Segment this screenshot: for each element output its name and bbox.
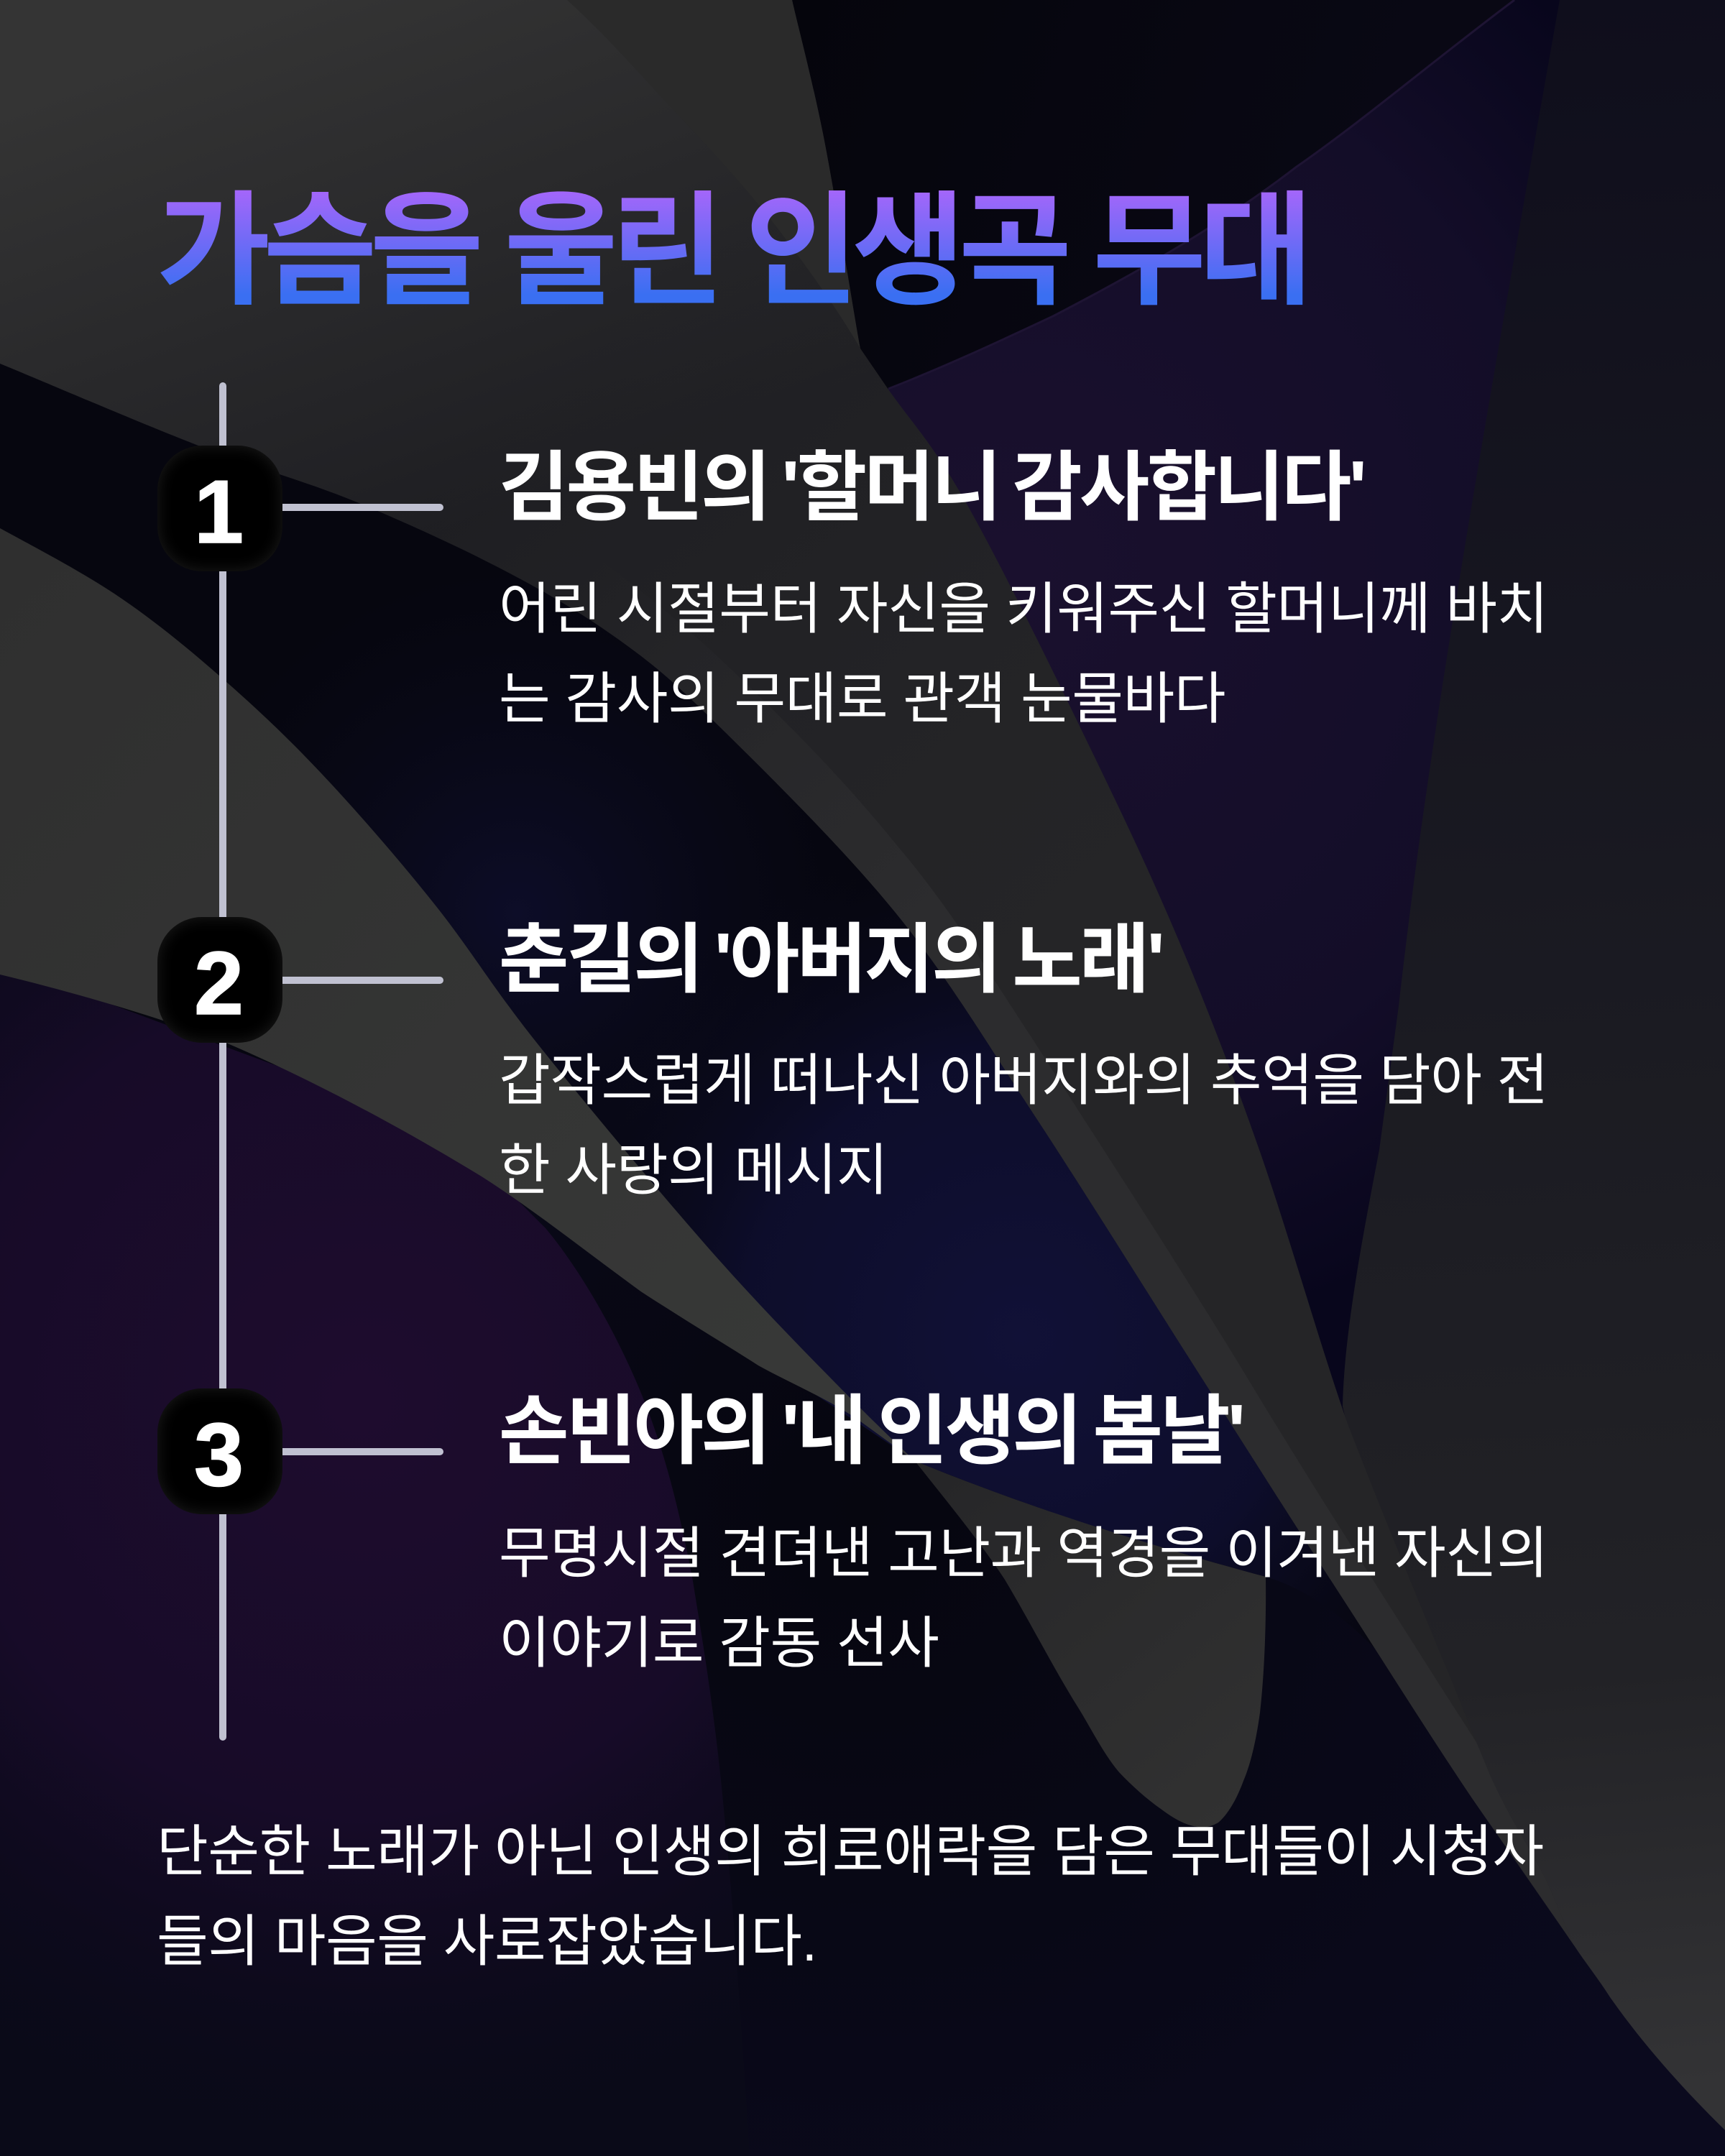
top dark region: [755, 0, 1514, 389]
left shape: [0, 528, 915, 1461]
number badge 2: [157, 917, 282, 1043]
closing summary: 단순한 노래가 아닌 인생의 희로애락을 담은 무대들이 시청자: [157, 1820, 1544, 1883]
closing summary: [157, 1820, 1544, 1973]
blue glow in central band: [0, 345, 1402, 1667]
right wedge: [1343, 0, 1725, 2130]
body 3: [499, 1521, 1548, 1674]
connector 1: [282, 504, 443, 511]
body 2: 한 사랑의 메시지: [499, 1138, 888, 1202]
connector 2: [282, 977, 443, 984]
lower dark region: [503, 1186, 1725, 2156]
dark band under the main shape: [0, 345, 1402, 1667]
closing summary: 들의 마음을 사로잡았습니다.: [157, 1909, 817, 1973]
petal: [915, 1461, 1266, 1828]
number badge 1: 1: [194, 463, 244, 562]
connector 3: [282, 1448, 443, 1455]
heading 2: 춘길의 '아버지의 노래': [499, 918, 1162, 1003]
number badge 2: 2: [194, 934, 244, 1033]
body 1: [499, 577, 1548, 730]
body 3: 이야기로 감동 선사: [499, 1611, 939, 1674]
heading 3: 손빈아의 '내 인생의 봄날': [499, 1389, 1243, 1474]
top purple region: [789, 0, 1725, 1725]
number badge 1: [157, 446, 282, 571]
lighter ribbon along band: [900, 918, 931, 959]
body 1: 는 감사의 무대로 관객 눈물바다: [499, 667, 1225, 730]
body 3: 무명시절 견뎌낸 고난과 역경을 이겨낸 자신의: [499, 1521, 1548, 1585]
title: 가슴을 울린 인생곡 무대: [157, 150, 1306, 330]
number badge 3: 3: [194, 1406, 244, 1505]
heading 1: 김용빈의 '할머니 감사합니다': [499, 446, 1364, 530]
number badge 3: [157, 1388, 282, 1514]
body 2: [499, 1049, 1548, 1202]
body 1: 어린 시절부터 자신을 키워주신 할머니께 바치: [499, 577, 1548, 640]
timeline vertical line: [219, 382, 226, 1741]
body 2: 갑작스럽게 떠나신 아버지와의 추억을 담아 전: [499, 1049, 1548, 1112]
upper strip: [567, 0, 860, 349]
